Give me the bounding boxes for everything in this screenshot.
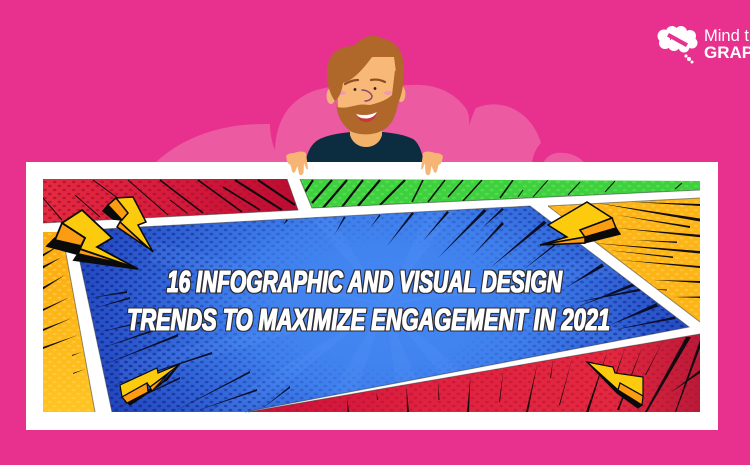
title: 16 INFOGRAPHIC AND VISUAL DESIGN xyxy=(167,264,562,299)
panel: blue centre xyxy=(80,206,689,412)
right hand xyxy=(421,152,443,175)
panel: red bottom xyxy=(246,330,702,414)
cheeks xyxy=(338,91,392,95)
neck xyxy=(350,124,382,147)
eyes xyxy=(354,87,376,91)
white card xyxy=(26,162,718,430)
lightning bolt: small top-left xyxy=(103,197,153,252)
face xyxy=(337,54,397,128)
character hands over card xyxy=(286,152,443,175)
lightning bolt: large top-left xyxy=(47,210,138,269)
comic artwork xyxy=(40,178,705,415)
panel: red top-left xyxy=(43,179,303,225)
lightning bolt: lower right xyxy=(587,362,643,408)
panel: yellow right xyxy=(545,195,702,325)
ears xyxy=(326,86,406,104)
white band shadows xyxy=(43,179,700,412)
left hand xyxy=(286,152,308,175)
hair xyxy=(327,36,404,101)
logo brain icon xyxy=(658,26,698,64)
mouth xyxy=(356,112,377,122)
lightning bolt: upper right xyxy=(540,202,620,245)
beard xyxy=(335,70,403,134)
panel: green top-right xyxy=(300,179,700,208)
pale cloud behind character xyxy=(155,85,585,163)
shirt xyxy=(305,132,424,163)
logo: Mind the Graph xyxy=(658,26,750,64)
title xyxy=(127,264,610,337)
lightning bolt: lower left xyxy=(120,364,180,405)
character: bearded man xyxy=(305,36,424,163)
sunburst rays xyxy=(120,240,640,384)
nose xyxy=(362,90,372,101)
panel: yellow left xyxy=(43,230,98,414)
brows xyxy=(345,80,385,84)
